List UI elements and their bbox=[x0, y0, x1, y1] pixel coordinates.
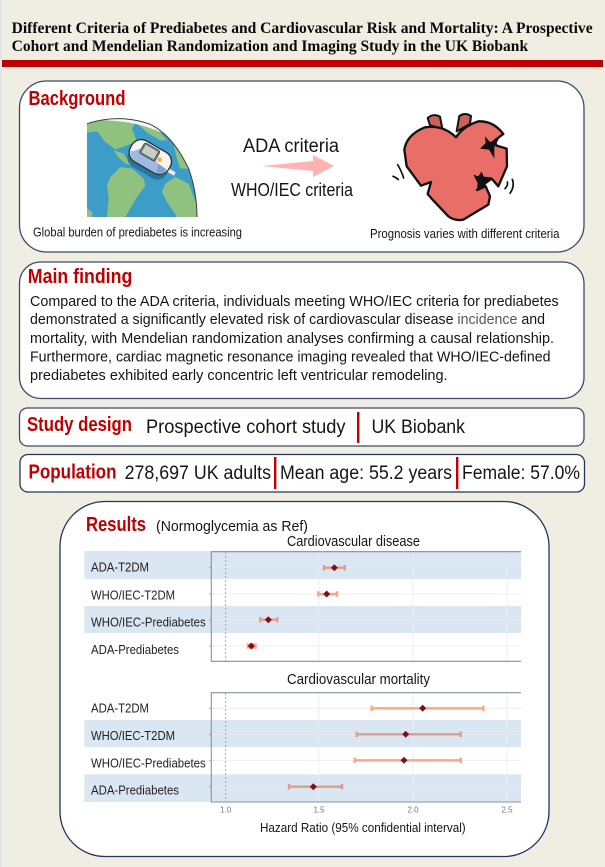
row: ADA-Prediabetes: ADA-Prediabetes bbox=[91, 783, 179, 798]
red title rule bbox=[2, 60, 603, 67]
row: ADA-T2DM: ADA-T2DM bbox=[91, 560, 149, 575]
text: main finding body: prediabetes exhibited early concentric left ventricular remodeling. bbox=[30, 367, 448, 384]
row: WHO/IEC-T2DM: WHO/IEC-T2DM bbox=[91, 728, 175, 743]
title bbox=[12, 20, 593, 55]
text: main finding body bbox=[30, 293, 559, 384]
heading: results: Results bbox=[86, 514, 146, 536]
row: ADA-T2DM: ADA-T2DM bbox=[91, 701, 149, 716]
text: mean age: Mean age: 55.2 years bbox=[280, 463, 452, 484]
x axis tick labels bbox=[220, 806, 513, 815]
row: WHO/IEC-T2DM: WHO/IEC-T2DM bbox=[91, 587, 175, 602]
text: main finding body: demonstrated a significantly elevated risk of cardiovascular disease incidence and bbox=[30, 311, 545, 328]
row: WHO/IEC-T2DM bbox=[91, 728, 461, 743]
chart: cardiovascular disease forest plot bbox=[84, 533, 521, 661]
arrow bbox=[262, 155, 334, 177]
row: WHO/IEC-Prediabetes bbox=[91, 756, 461, 771]
row: ADA-T2DM bbox=[91, 560, 345, 575]
text: reference note: (Normoglycemia as Ref) bbox=[156, 518, 308, 535]
row: ADA-Prediabetes bbox=[91, 642, 257, 657]
panel: background bbox=[20, 81, 584, 252]
caption: global burden: Global burden of prediabetes is increasing bbox=[33, 226, 242, 240]
icon: glucose meter bbox=[123, 136, 182, 187]
panel: main finding bbox=[20, 262, 584, 398]
panel: population bbox=[20, 454, 584, 492]
row: WHO/IEC-Prediabetes: WHO/IEC-Prediabetes bbox=[91, 756, 206, 771]
heading: population: Population bbox=[28, 462, 116, 484]
text: UK Biobank: UK Biobank bbox=[372, 417, 465, 438]
x axis tick labels: 2.5 bbox=[501, 806, 513, 815]
row: ADA-Prediabetes bbox=[91, 783, 342, 798]
heading: main finding: Main finding bbox=[28, 266, 132, 288]
label: ADA criteria: ADA criteria bbox=[243, 136, 339, 157]
x axis title: Hazard Ratio (95% confidential interval) bbox=[260, 821, 466, 835]
x axis tick labels: 1.0 bbox=[220, 806, 232, 815]
row: WHO/IEC-Prediabetes: WHO/IEC-Prediabetes bbox=[91, 615, 206, 630]
icon: damaged heart bbox=[393, 114, 513, 220]
chart: cardiovascular mortality forest plot bbox=[84, 671, 521, 835]
title: Different Criteria of Prediabetes and Cardiovascular Risk and Mortality: A Prospective bbox=[12, 20, 593, 37]
x axis tick labels: 2.0 bbox=[407, 806, 419, 815]
heading: background: Background bbox=[28, 88, 126, 110]
text: main finding body: Furthermore, cardiac magnetic resonance imaging revealed that WHO/IEC-defined bbox=[30, 348, 550, 366]
text: female share: Female: 57.0% bbox=[462, 463, 580, 484]
panel: study design bbox=[20, 408, 584, 446]
heading: study design: Study design bbox=[27, 414, 132, 436]
chart title: Cardiovascular disease bbox=[287, 533, 420, 550]
icon: globe with glucose meter bbox=[87, 112, 199, 219]
text: main finding body: Compared to the ADA criteria, individuals meeting WHO/IEC criteria for prediabetes bbox=[30, 293, 559, 310]
text: main finding body: mortality, with Mendelian randomization analyses confirming a causal relationship. bbox=[30, 330, 554, 347]
row: WHO/IEC-T2DM bbox=[91, 587, 337, 602]
caption: prognosis: Prognosis varies with different criteria bbox=[370, 227, 560, 241]
panel: results bbox=[60, 502, 549, 856]
text: sample size: 278,697 UK adults bbox=[125, 463, 271, 484]
title: Cohort and Mendelian Randomization and Imaging Study in the UK Biobank bbox=[12, 38, 528, 55]
x axis tick labels: 1.5 bbox=[313, 806, 325, 815]
row: ADA-T2DM bbox=[91, 701, 483, 716]
text: prospective cohort study: Prospective cohort study bbox=[146, 417, 346, 438]
chart title: Cardiovascular mortality bbox=[287, 671, 430, 688]
label: WHO/IEC criteria: WHO/IEC criteria bbox=[231, 180, 354, 200]
row: ADA-Prediabetes: ADA-Prediabetes bbox=[91, 642, 179, 657]
